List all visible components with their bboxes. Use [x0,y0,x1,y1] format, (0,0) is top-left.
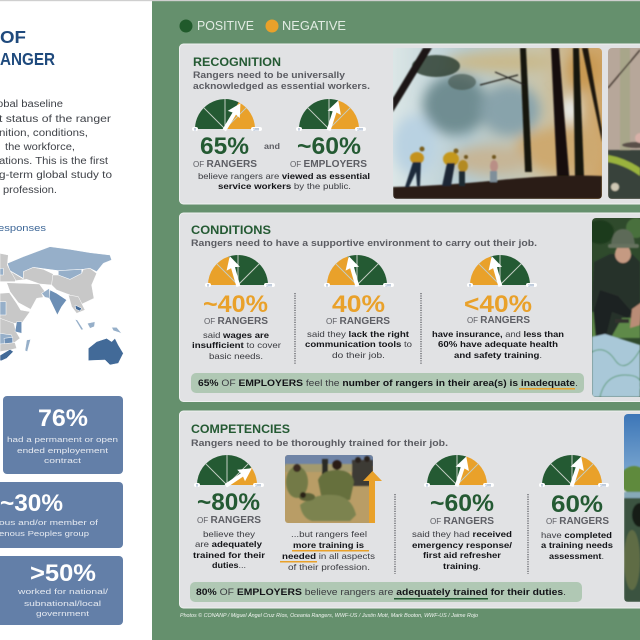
heading: competencies: COMPETENCIES [191,424,290,436]
photo credits: Photos © CONANP / Miguel Ángel Cruz Ríos, Oceania Rangers, WWF-US / Justin Mott, Mark Booton, WWF-US / Jaime Rojo [180,612,478,619]
stat box: ~30%: ~30% [0,490,63,517]
stat: ~60% first aid: OF RANGERS [430,516,494,527]
stat: ~80% trained: ~80% [197,489,260,516]
gauge: 40% wages [205,254,275,288]
conditions subtitle: Rangers need to have a supportive environment to carry out their job. [191,238,537,248]
stat: 40% communication tools [305,291,412,360]
intro text: ations. This is the first [0,156,108,167]
stat: ~60% first aid: said they had received [412,529,512,539]
intro text: g-term global study to [0,170,113,181]
callout: employers on training [190,582,582,602]
gauge: 40% wages: 0 [207,283,209,287]
gauge: 40% wages: 100 [266,283,272,287]
gauge: 60% needs assessment [539,454,609,489]
stat: under 40% insurance: and safety training . [454,350,542,360]
stat: 40% communication tools: communication tools to [305,339,412,349]
stat: under 40% insurance [432,291,564,360]
stat box: >50%: worked for national/ [17,587,109,596]
stat: 60% needs assessment [541,491,613,561]
stat box: >50%: subnational/local [24,599,101,608]
callout: employers on ranger numbers: 65% OF EMPLOYERS feel the number of rangers in their area(s) is inadequate . [198,378,578,388]
stat: ~40% wages [192,291,281,361]
gauge: under 40% insurance [467,254,537,288]
recognition subtitle: acknowledged as essential workers. [193,81,370,91]
stat: ~80% trained: duties... [212,560,246,570]
stat: ~80% trained: trained for their [193,550,266,560]
photo: firefighters in smoky forest [393,48,605,199]
stat: ~80% trained: believe they [203,529,256,539]
gauge: under 40% insurance: 0 [469,283,471,287]
training description [280,529,375,572]
stat: ~40% wages: OF RANGERS [204,316,268,327]
stat: under 40% insurance: have insurance, and less than [432,329,564,339]
intro text: profession. [3,185,57,196]
intro text [0,99,113,196]
intro text: t status of the ranger [0,114,112,125]
legend [180,19,346,33]
panel: conditions [180,213,640,402]
gauge: 60% employers: 0 [298,127,300,131]
stat: ~40% wages: basic needs. [209,351,263,361]
stat: 60% needs assessment: OF RANGERS [546,516,609,527]
stat: 60% of employers: OF EMPLOYERS [290,159,367,170]
stat box: 76%: 76% [38,405,88,432]
recognition description [198,171,370,191]
legend: POSITIVE [197,19,254,33]
stat box: ~30% [0,482,123,548]
stat box: ~30%: ous and/or member of [0,518,99,527]
gauge: 60% first aid: 0 [426,483,428,487]
recognition description: believe rangers are viewed as essential [198,171,370,181]
gauge: 80% adequately trained: 0 [196,483,198,487]
gauge: 40% communication tools: 0 [326,283,328,287]
stat: ~40% wages: insufficient to cover [192,340,281,350]
stat: ~60% first aid: emergency response/ [412,540,513,550]
stat: ~60% first aid: training . [443,561,481,571]
gauge: under 40% insurance: 100 [528,283,534,287]
stat: ~80% trained: OF RANGERS [197,515,261,526]
stat box: 76%: had a permanent or open [7,435,118,444]
panel: competencies [180,411,640,608]
stat: 60% needs assessment: a training needs [541,540,613,550]
gauge: 65% rangers: 0 [194,127,196,131]
photo: ranger reading a map [592,218,640,397]
firefighters [405,146,498,187]
stat box: 76% [3,396,123,474]
gauge: 65% rangers [192,99,262,134]
stat: under 40% insurance: <40% [464,291,532,318]
stat: 65% of rangers: 65% [200,133,249,160]
callout: employers on ranger numbers [191,373,584,393]
stat box: >50%: >50% [30,560,96,587]
intro text: the workforce, [5,142,75,153]
intro text: nition, conditions, [0,128,88,139]
heading: conditions: CONDITIONS [191,225,271,237]
heading: recognition: RECOGNITION [193,57,281,69]
stat: 60% needs assessment: assessment . [549,551,604,561]
gauge: 60% needs assessment: 100 [600,483,606,487]
title: ANGER [0,49,55,69]
stat: ~60% first aid: first aid refresher [423,550,502,560]
stat: ~40% wages: said wages are [203,330,269,340]
gauge: 60% first aid [424,454,494,489]
training description: of their profession. [288,562,370,572]
connector word: and [264,142,280,151]
stat: 60% needs assessment: have completed [541,530,612,540]
training description: more training is [293,540,364,550]
title: OF [0,27,26,47]
stat: 40% communication tools: 40% [332,291,385,318]
panel: recognition [180,44,640,204]
gauge: 60% needs assessment: 0 [541,483,543,487]
stat box: ~30%: enous Peoples group [0,529,89,538]
stat: ~60% first aid: ~60% [430,490,494,517]
stat: 40% communication tools: OF RANGERS [326,316,390,327]
icon: orange up arrow [363,471,382,523]
stat: ~80% trained: are adequately [195,539,262,549]
stat: ~40% wages: ~40% [203,291,268,318]
stat box: >50%: government [36,609,90,618]
world map [0,247,123,365]
gauge: 80% adequately trained: 100 [255,483,261,487]
stat box: >50% [0,556,123,625]
gauge: 60% employers [296,98,366,133]
stat: 65% of rangers [193,133,257,170]
stat: 60% needs assessment: 60% [551,491,603,518]
recognition subtitle: Rangers need to be universally [193,70,345,80]
gauge: 60% first aid: 100 [485,483,491,487]
stat: 60% of employers: ~60% [297,133,361,160]
callout: employers on training: 80% OF EMPLOYERS believe rangers are adequately trained for their duties . [196,587,566,597]
stat: 60% of employers [290,133,367,170]
title [0,27,55,69]
stat: 40% communication tools: said they lack the right [307,329,409,339]
legend: NEGATIVE [282,19,346,33]
stat box: 76%: contract [44,456,82,465]
gauge: 65% rangers: 100 [253,127,259,131]
stat: under 40% insurance: OF RANGERS [467,315,530,326]
training description: ...but rangers feel [291,529,367,539]
photo: ranger in mangrove water [624,414,640,602]
recognition subtitle [193,70,370,91]
training description: needed in all aspects [282,551,375,561]
gauge: 40% communication tools [324,254,394,288]
stat: ~80% trained [193,489,266,570]
stat: under 40% insurance: 60% have adequate health [438,339,558,349]
competencies subtitle: Rangers need to be thoroughly trained for their job. [191,438,448,448]
photo: ranger in mossy forest [608,48,640,199]
gauge: 60% employers: 100 [357,127,363,131]
stat: ~60% first aid [412,490,513,571]
gauge: 80% adequately trained [194,455,264,492]
stat: 40% communication tools: do their job. [332,350,385,360]
photo: rangers training [285,455,373,523]
gauge: 40% communication tools: 100 [385,283,391,287]
recognition description: service workers by the public. [218,181,351,191]
stat: 65% of rangers: OF RANGERS [193,159,257,170]
stat box: 76%: ended employement [17,446,109,455]
